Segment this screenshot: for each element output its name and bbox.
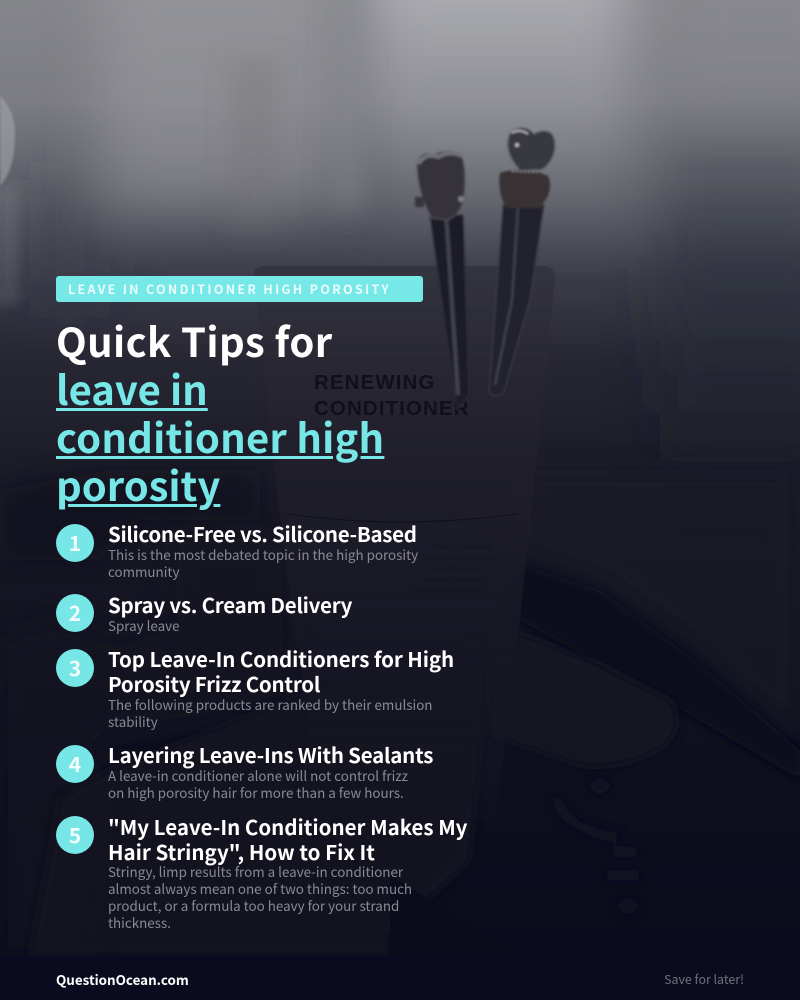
dark diagonal object bottom bbox=[390, 875, 520, 956]
tip 4 description: A leave-in conditioner alone will not control frizz bbox=[108, 765, 408, 785]
tube label text: RENEWING bbox=[314, 371, 436, 394]
tip 4 bbox=[56, 739, 433, 802]
tip 3 description: stability bbox=[108, 711, 158, 731]
tip 1 description bbox=[108, 544, 418, 581]
number badge 4 bbox=[56, 745, 94, 783]
footer band bbox=[0, 956, 800, 1000]
number badge 5: 5 bbox=[69, 820, 81, 850]
tip 1 description: community bbox=[108, 561, 179, 581]
title: Quick Tips for bbox=[56, 311, 333, 369]
tip 5 description bbox=[108, 861, 412, 932]
tip 4 description bbox=[108, 765, 408, 802]
number badge 2: 2 bbox=[69, 598, 81, 628]
background photo: blurred bathroom scene with hair clips and conditioner tube: massage down the hair bbox=[412, 588, 485, 595]
title: conditioner high bbox=[56, 407, 384, 465]
tip 1 description: This is the most debated topic in the high porosity bbox=[108, 544, 418, 564]
tip 3 bbox=[56, 643, 454, 731]
tip 2 heading: Spray vs. Cream Delivery bbox=[108, 589, 352, 619]
hand shape left bbox=[0, 520, 290, 956]
left hair clip bbox=[415, 151, 469, 410]
back shapes bbox=[0, 470, 260, 560]
tip 1 heading: Silicone-Free vs. Silicone-Based bbox=[108, 518, 417, 548]
background photo: blurred bathroom scene with hair clips and conditioner tube: leaving it nourished bbox=[425, 577, 485, 584]
tip 3 heading: Porosity Frizz Control bbox=[108, 668, 320, 698]
tag: topic label: LEAVE IN CONDITIONER HIGH POROSITY bbox=[68, 279, 391, 298]
tip 5 description: Stringy, limp results from a leave-in conditioner bbox=[108, 861, 403, 881]
tip 3 heading bbox=[108, 643, 454, 698]
number badge 2 bbox=[56, 594, 94, 632]
tip 4 heading: Layering Leave-Ins With Sealants bbox=[108, 739, 433, 769]
tip 1 bbox=[56, 518, 418, 581]
footer brand: QuestionOcean.com bbox=[56, 969, 189, 989]
tip 5 description: product, or a formula too heavy for your strand bbox=[108, 895, 399, 915]
background photo: blurred bathroom scene with hair clips and conditioner tube: softens and detangles bbox=[425, 555, 494, 562]
number badge 3 bbox=[56, 649, 94, 687]
tip 5 heading: "My Leave-In Conditioner Makes My bbox=[108, 811, 467, 841]
conditioner tube bbox=[254, 266, 555, 820]
number badge 1 bbox=[56, 524, 94, 562]
background photo: blurred bathroom scene with hair clips and conditioner tube: and seal moisture bbox=[430, 566, 485, 573]
right hair clip bbox=[489, 128, 555, 396]
tip 5 description: almost always mean one of two things: too much bbox=[108, 878, 412, 898]
title: leave in bbox=[56, 359, 208, 417]
title: porosity bbox=[56, 455, 220, 513]
tip 5 heading bbox=[108, 811, 468, 866]
tip 2 bbox=[56, 589, 352, 635]
tip 3 description bbox=[108, 694, 432, 731]
tip 3 description: The following products are ranked by their emulsion bbox=[108, 694, 432, 714]
tip 2 description: Spray leave bbox=[108, 615, 180, 635]
number badge 5 bbox=[56, 816, 94, 854]
tip 5 bbox=[56, 811, 468, 932]
background photo: blurred bathroom scene with hair clips and conditioner tube: leave-in conditioner bbox=[432, 544, 493, 551]
tip 5 heading: Hair Stringy", How to Fix It bbox=[108, 836, 375, 866]
title bbox=[56, 311, 384, 513]
number badge 1: 1 bbox=[69, 528, 81, 558]
tag: topic label bbox=[56, 276, 423, 302]
tube label text bbox=[314, 371, 470, 420]
tip 3 heading: Top Leave-In Conditioners for High bbox=[108, 643, 454, 673]
tip 5 description: thickness. bbox=[108, 912, 171, 932]
number badge 4: 4 bbox=[69, 749, 81, 779]
tube label text: CONDITIONER bbox=[314, 397, 470, 420]
number badge 3: 3 bbox=[69, 653, 81, 683]
footer call to action: Save for later! bbox=[664, 970, 744, 988]
tip 4 description: on high porosity hair for more than a few hours. bbox=[108, 782, 404, 802]
bottle cap rings bbox=[556, 798, 642, 875]
